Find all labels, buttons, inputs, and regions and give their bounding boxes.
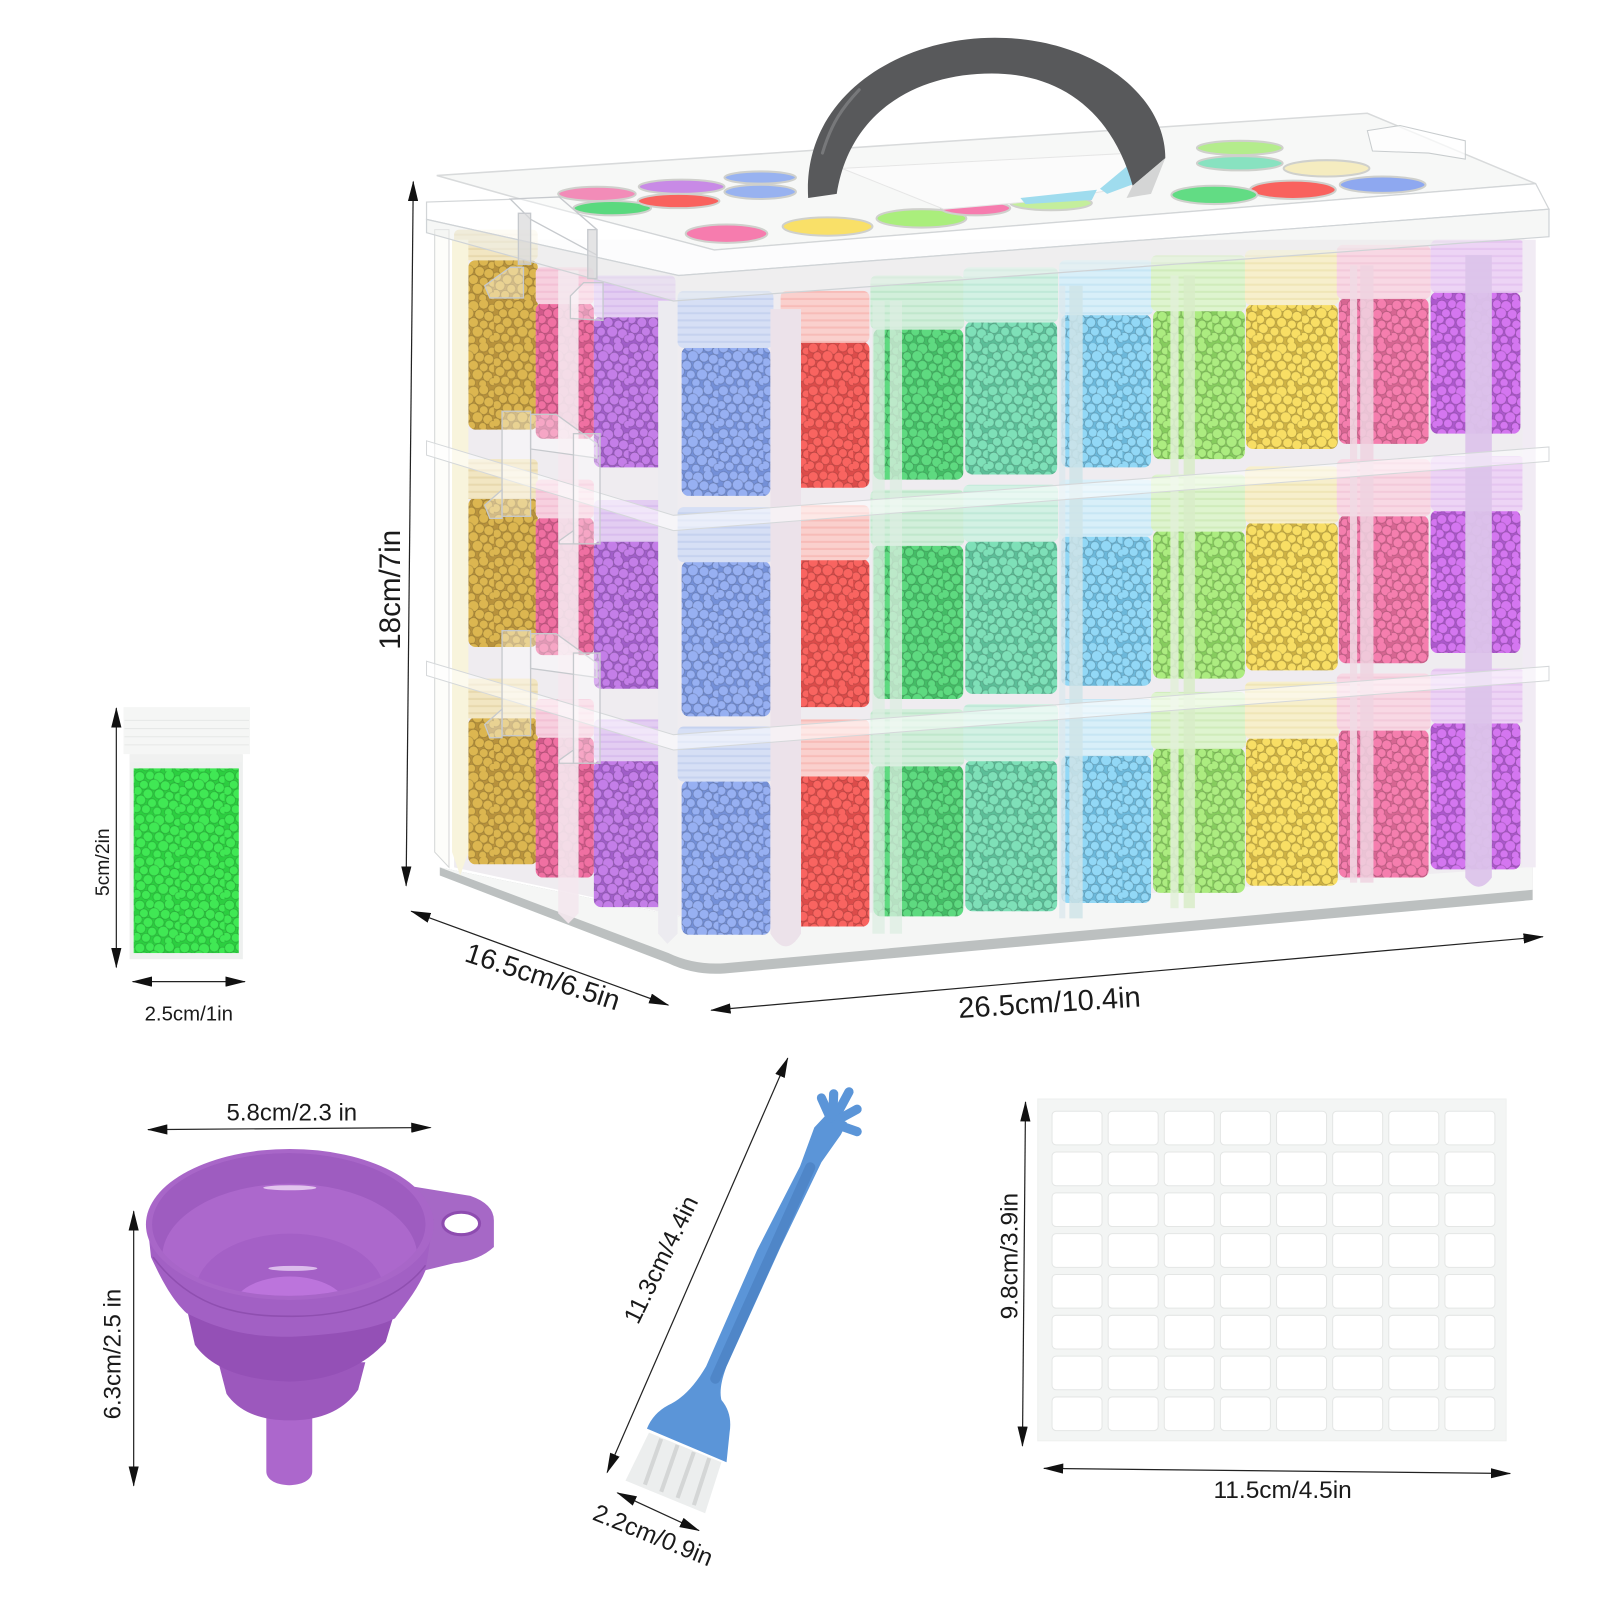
box back frame xyxy=(435,230,449,867)
funnel stem xyxy=(266,1408,312,1485)
panel: funnel xyxy=(99,1099,494,1486)
funnel ear xyxy=(408,1186,494,1271)
funnel interior xyxy=(152,1153,426,1296)
funnel rim xyxy=(146,1149,434,1300)
plastic inner fan xyxy=(842,153,1133,209)
handle xyxy=(808,38,1165,198)
lid top plate xyxy=(437,113,1536,250)
dimension: brush length: 11.3cm/4.4in xyxy=(619,1192,704,1328)
dimension: box height: 18cm/7in xyxy=(374,530,407,650)
brush hand fingers xyxy=(821,1092,857,1132)
bottle beads xyxy=(134,768,239,953)
dimension: bottle height: 5cm/2in xyxy=(92,828,114,896)
dimension: bottle width xyxy=(133,982,245,1025)
tier 2 jars xyxy=(454,456,1524,716)
panel: stacking storage box xyxy=(427,38,1549,974)
brush bristles xyxy=(626,1433,721,1513)
funnel hole xyxy=(443,1212,480,1235)
lid jars seen through lid xyxy=(558,141,1426,243)
funnel rim ridge xyxy=(153,1257,426,1316)
panel: label sheet xyxy=(996,1099,1510,1504)
dimension: box height xyxy=(374,182,413,886)
dimension: sheet height: 9.8cm/3.9in xyxy=(996,1193,1023,1319)
translucent divider strips xyxy=(452,240,1536,946)
tier 1 jars xyxy=(454,230,1524,496)
dimension: box depth xyxy=(411,911,668,1016)
funnel upper section xyxy=(147,1219,434,1337)
tier 3 jars xyxy=(454,668,1524,935)
panel: brush tool xyxy=(589,1058,857,1572)
beads in lid fan xyxy=(1020,163,1135,204)
brush handle xyxy=(647,1112,847,1462)
funnel lower section xyxy=(218,1362,365,1420)
box interior backing xyxy=(454,240,1526,923)
lid front band xyxy=(427,184,1549,301)
dimension: funnel width: 5.8cm/2.3 in xyxy=(227,1099,357,1126)
funnel middle section xyxy=(187,1308,395,1382)
right rear clasp xyxy=(1367,126,1465,159)
dimension: box width: 26.5cm/10.4in xyxy=(957,982,1142,1025)
bottle body xyxy=(130,755,243,959)
dimension: funnel height: 6.3cm/2.5 in xyxy=(99,1289,126,1419)
brush slot xyxy=(715,1167,810,1379)
dimension: brush width: 2.2cm/0.9in xyxy=(589,1500,717,1572)
panel: single bottle xyxy=(92,707,250,1025)
dimension: sheet width: 11.5cm/4.5in xyxy=(1214,1477,1352,1504)
label sheet backing xyxy=(1038,1099,1506,1441)
dimension: bottle width: 2.5cm/1in xyxy=(145,1003,233,1025)
dimension: brush length xyxy=(607,1058,788,1472)
clear clasps xyxy=(485,197,603,763)
tier shelves xyxy=(427,441,1549,750)
dimension: box width xyxy=(711,937,1543,1025)
box base plate xyxy=(440,865,1533,974)
dimension: sheet width xyxy=(1044,1468,1510,1504)
dimension: box depth: 16.5cm/6.5in xyxy=(462,937,624,1016)
bottle cap xyxy=(123,707,250,762)
label grid xyxy=(1052,1111,1495,1431)
dimension: sheet height xyxy=(996,1102,1026,1446)
